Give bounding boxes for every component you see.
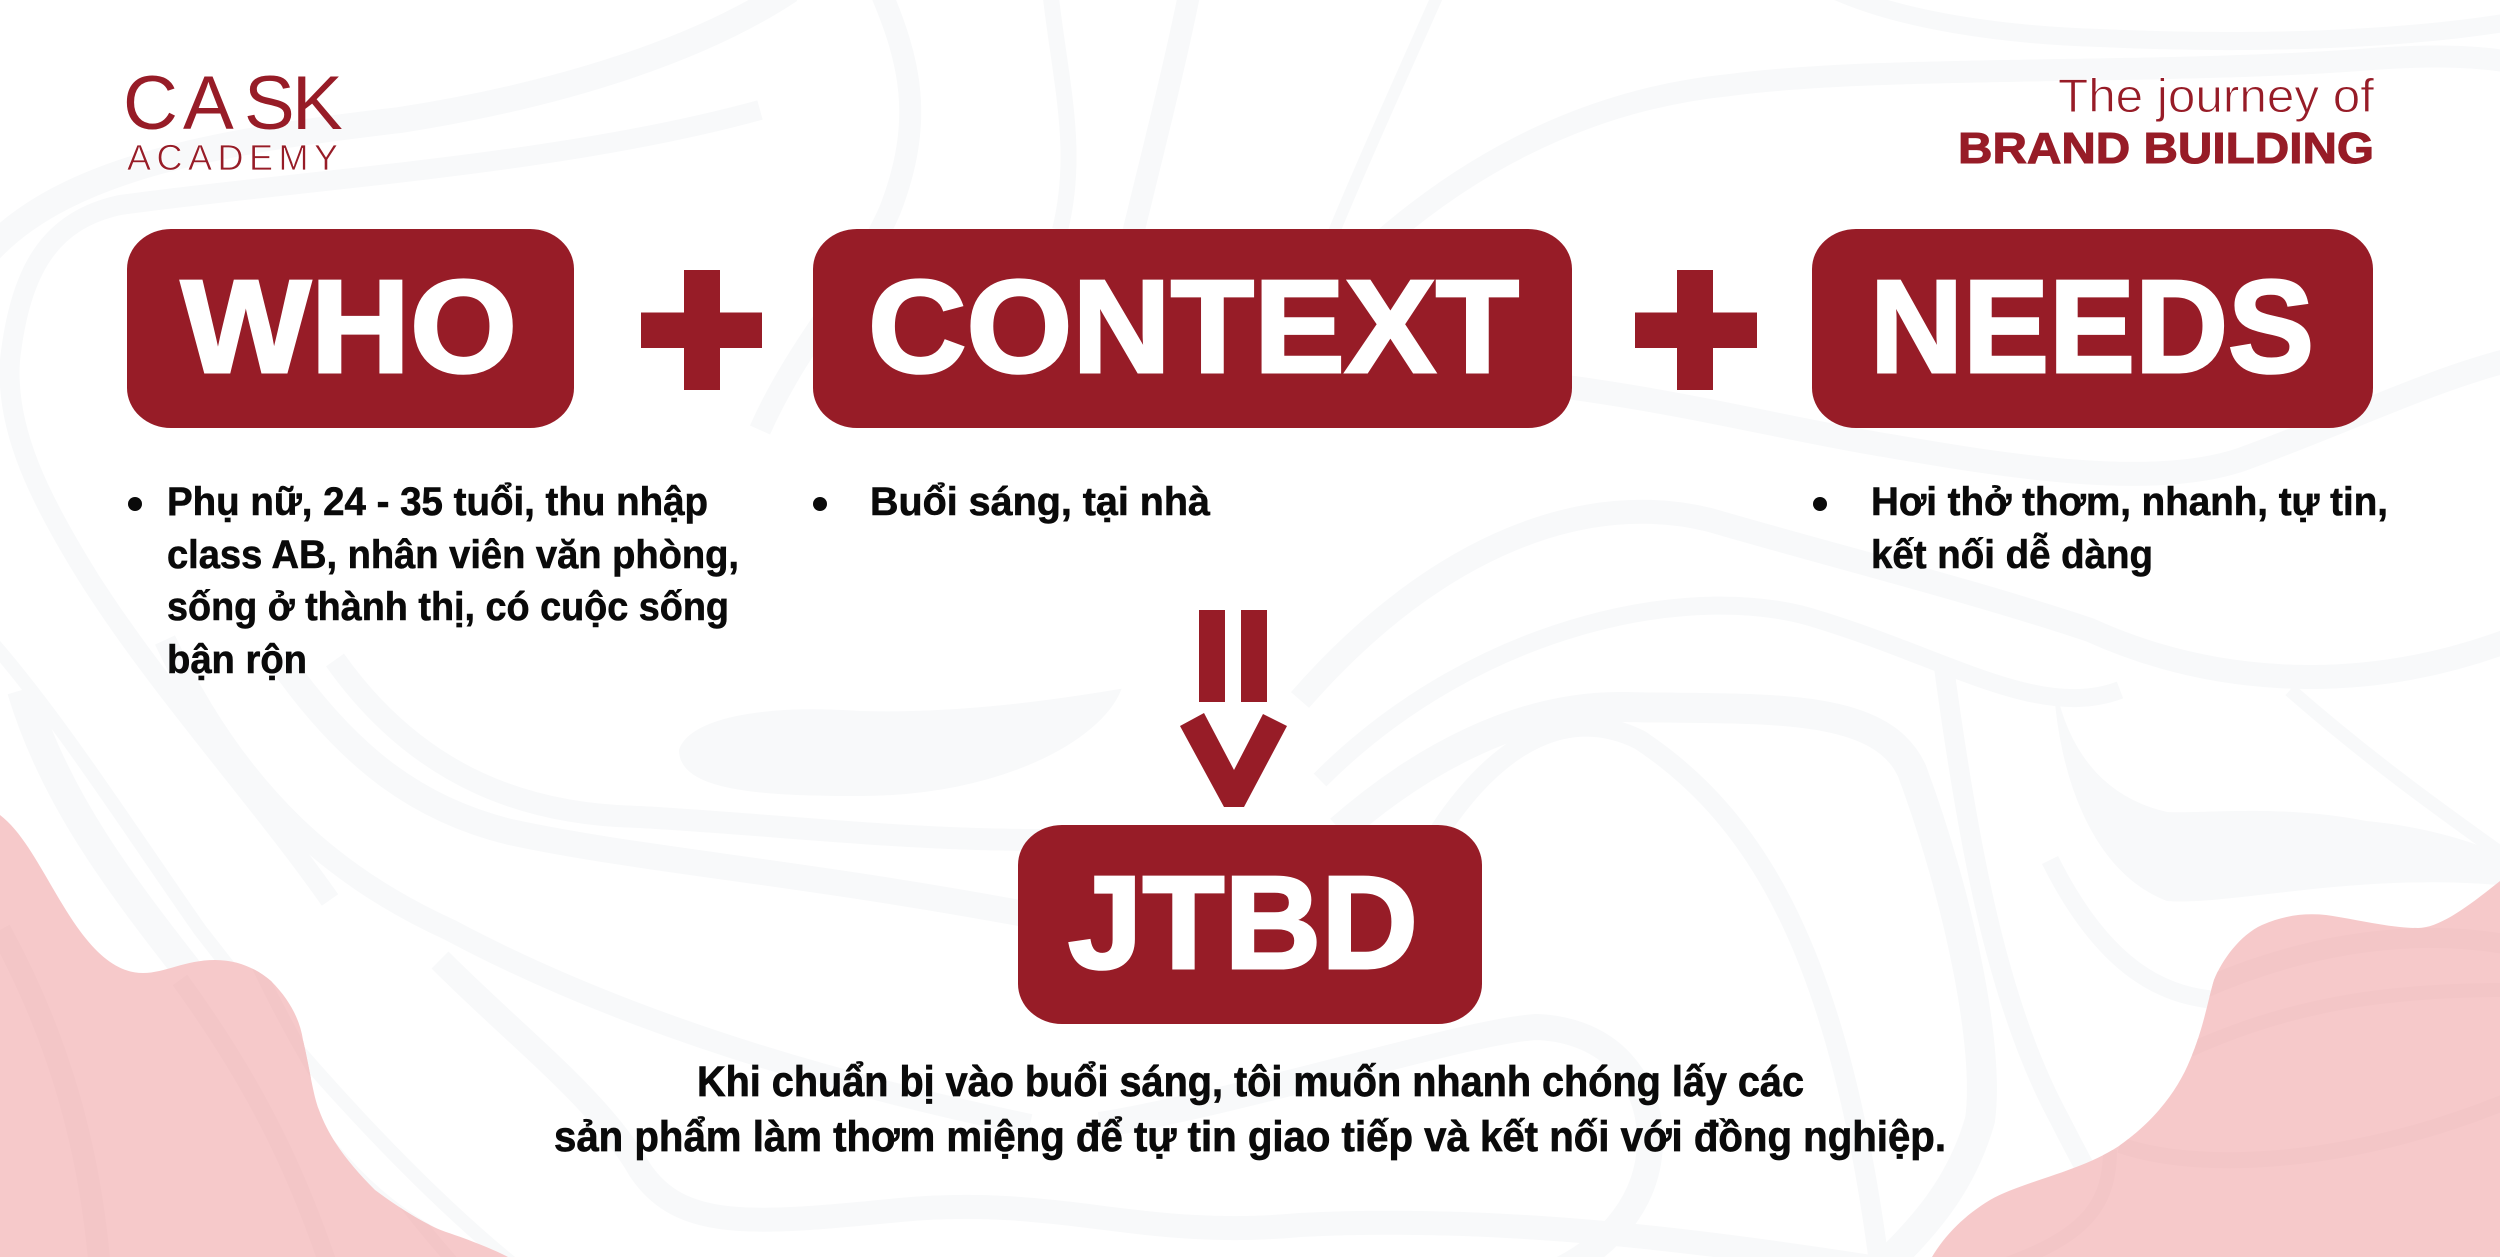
panel: NEEDS: NEEDS bbox=[1870, 253, 2314, 400]
text block: NEEDS details: kết nối dễ dàng bbox=[1871, 531, 2153, 577]
decorative pink blob bottom left bbox=[0, 815, 508, 1257]
logo word CASK: CASK bbox=[123, 61, 343, 146]
text block: WHO details: sống ở thành thị, có cuộc sống bbox=[167, 585, 729, 629]
text block: WHO details: bận rộn bbox=[167, 638, 307, 682]
icon: plus 2 bbox=[1635, 270, 1757, 390]
logo: Cask Academy bbox=[123, 61, 343, 178]
icon: plus 1 bbox=[641, 270, 762, 390]
panel: JTBD bbox=[1018, 825, 1482, 1024]
logo word ACADEMY: ACADEMY bbox=[127, 137, 338, 178]
text block: WHO details bbox=[128, 480, 739, 682]
panel: WHO bbox=[127, 229, 574, 428]
text block: NEEDS details bbox=[1813, 480, 2388, 577]
text block: WHO details: Phụ nữ, 24 - 35 tuổi, thu nhập bbox=[167, 480, 708, 524]
panel: WHO: WHO bbox=[181, 253, 517, 400]
panel: NEEDS bbox=[1812, 229, 2373, 428]
arrow: equals to JTBD bbox=[1180, 610, 1287, 807]
text block: JTBD statement: Khi chuẩn bị vào buổi sáng, tôi muốn nhanh chóng lấy các bbox=[697, 1058, 1804, 1106]
text block: NEEDS details: Hơi thở thơm, nhanh, tự tin, bbox=[1871, 480, 2388, 524]
header: The journey of Brand Building bbox=[1958, 69, 2375, 173]
text block: JTBD statement bbox=[554, 1058, 1946, 1161]
text block: JTBD statement: sản phẩm làm thơm miệng để tự tin giao tiếp và kết nối với đồng nghiệp. bbox=[554, 1113, 1946, 1161]
text block: CONTEXT details: Buổi sáng, tại nhà bbox=[870, 480, 1211, 524]
decorative pink blob bottom right bbox=[1932, 881, 2500, 1257]
header line bold: BRAND BUILDING bbox=[1958, 124, 2374, 173]
header line light: The journey of bbox=[2058, 69, 2375, 122]
text block: WHO details: class AB, nhân viên văn phòng, bbox=[167, 533, 739, 577]
panel: JTBD: JTBD bbox=[1068, 849, 1418, 996]
panel: CONTEXT bbox=[813, 229, 1572, 428]
panel: CONTEXT: CONTEXT bbox=[868, 253, 1519, 400]
